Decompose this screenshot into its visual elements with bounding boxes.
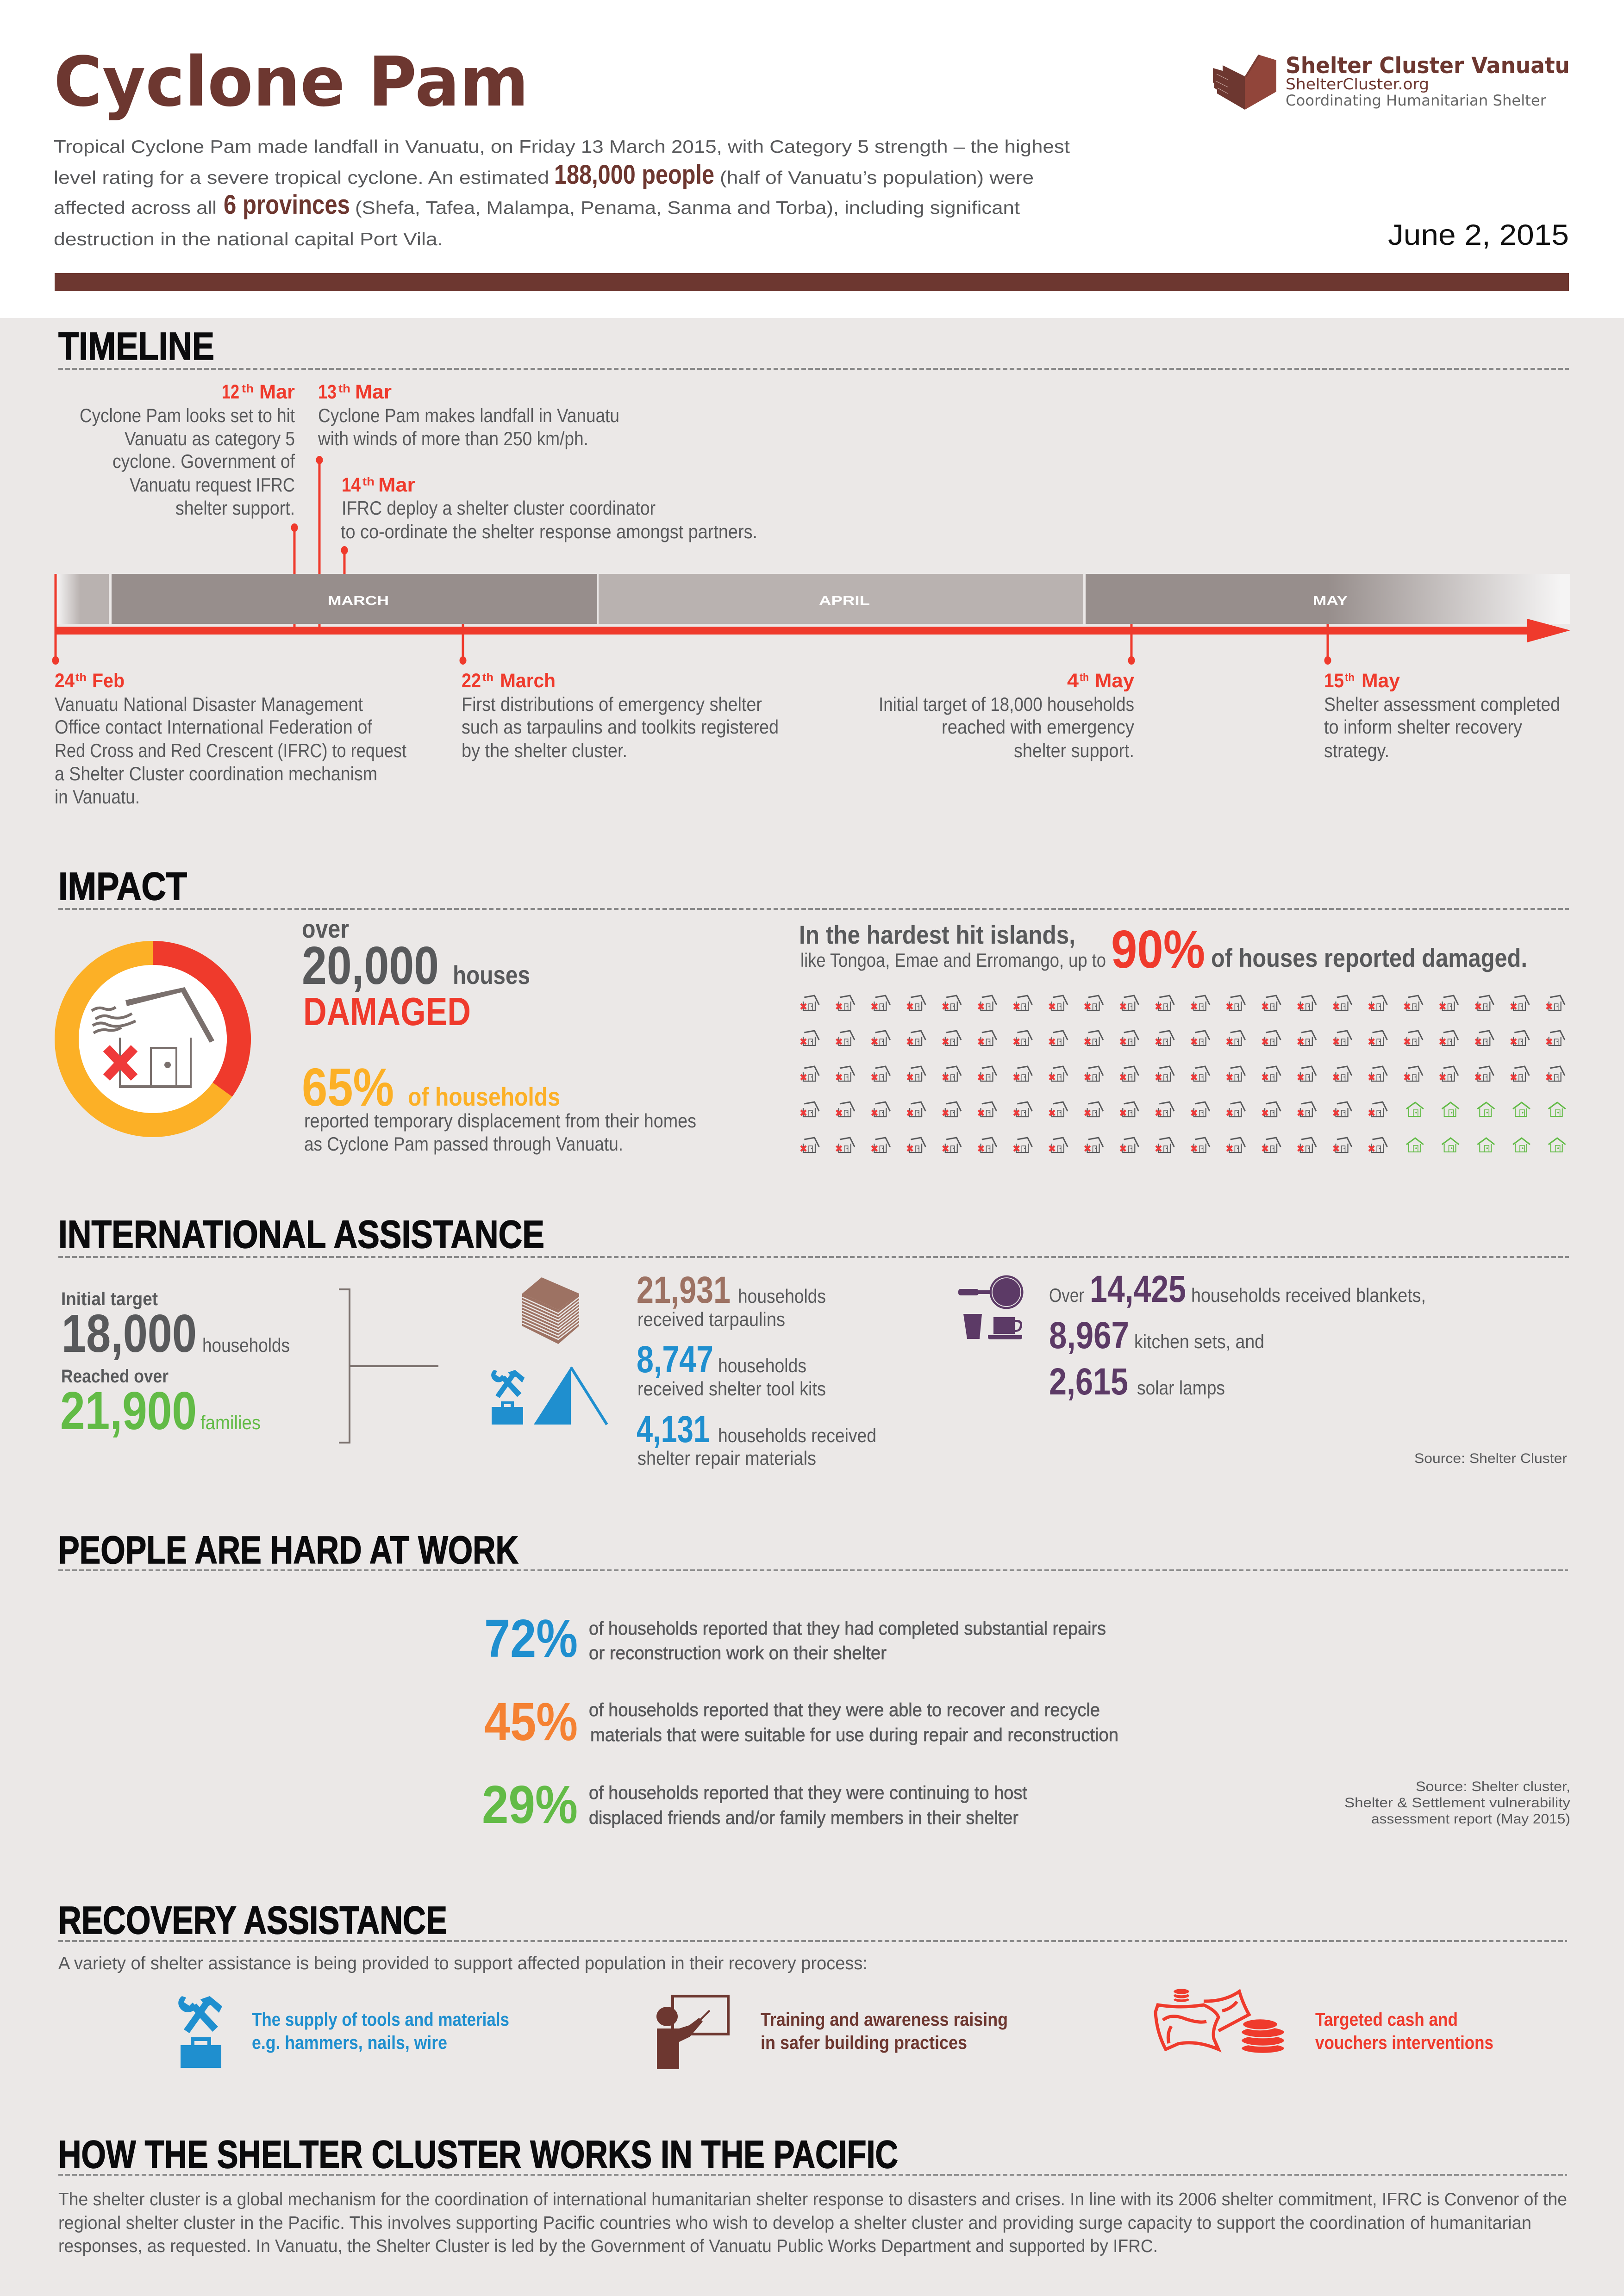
stat: blankets, kitchen sets, solar lamps: solar lamps <box>1137 1377 1225 1399</box>
month band: MARCH <box>328 593 389 608</box>
source note: Source: Shelter cluster, <box>1416 1779 1570 1794</box>
month band <box>57 574 1570 624</box>
stat: 72%: 72% <box>484 1608 578 1668</box>
event: 12th Mar: cyclone. Government of <box>112 450 295 472</box>
event: 24th Feb: 24 <box>55 670 75 692</box>
event: 12th Mar: Mar <box>259 381 295 403</box>
stat: blankets, kitchen sets, solar lamps: households received blankets, <box>1191 1284 1426 1306</box>
stat: blankets, kitchen sets, solar lamps: 8,967 <box>1049 1314 1129 1356</box>
event: 14th Mar: Mar <box>378 474 415 496</box>
title: Cyclone Pam <box>54 42 529 122</box>
stat: 20,000 houses damaged: 20,000 <box>302 935 439 996</box>
stat: blankets, kitchen sets, solar lamps: 2,615 <box>1049 1361 1128 1403</box>
event: 24th Feb: th <box>75 671 87 684</box>
stat: 45%: materials that were suitable for use during repair and reconstruction <box>590 1725 1118 1745</box>
stat: 65% of households: reported temporary displacement from their homes <box>304 1110 696 1132</box>
event: 22nd March: th <box>482 671 493 684</box>
intro paragraph: (half of Vanuatu’s population) were <box>720 168 1034 188</box>
intro paragraph <box>54 137 1070 249</box>
stat: blankets, kitchen sets, solar lamps <box>1049 1268 1426 1403</box>
event: 12th Mar: shelter support. <box>175 497 295 519</box>
stat: 45% <box>484 1692 1118 1752</box>
header <box>54 42 1570 291</box>
stat: 90% of houses: 90% <box>1111 919 1205 979</box>
stat: 72%: or reconstruction work on their shelter <box>589 1643 887 1663</box>
stat: 65% of households: of households <box>408 1082 560 1111</box>
stat: 90% of houses: In the hardest hit islands, <box>799 920 1075 949</box>
closing paragraph: responses, as requested. In Vanuatu, the Shelter Cluster is led by the Government of Vanuatu Public Works Department and supported by IFRC. <box>58 2236 1158 2256</box>
item: tools: e.g. hammers, nails, wire <box>252 2033 447 2053</box>
stat: blankets, kitchen sets, solar lamps: Over <box>1049 1284 1084 1306</box>
stat: tarpaulins <box>637 1269 826 1330</box>
intro paragraph: destruction in the national capital Port Vila. <box>54 230 443 249</box>
stat: 72%: of households reported that they had completed substantial repairs <box>589 1618 1106 1639</box>
event: 13th Mar <box>318 381 619 449</box>
month band: MAY <box>1313 593 1348 608</box>
stat: tarpaulins: 21,931 <box>637 1269 731 1311</box>
stat: 72% <box>484 1608 1106 1668</box>
event: 4th May: 4 <box>1067 670 1079 692</box>
icon: tools and tent <box>491 1367 607 1425</box>
event: 22nd March: 22 <box>462 670 481 692</box>
stat: target and reached: 18,000 <box>62 1303 197 1363</box>
event: 22nd March <box>462 670 779 761</box>
item: tools <box>178 1996 509 2068</box>
event: 12th Mar <box>80 381 295 519</box>
heading: international assistance: INTERNATIONAL ASSISTANCE <box>58 1213 544 1256</box>
stems <box>52 456 1331 665</box>
event: 22nd March: First distributions of emergency shelter <box>462 693 762 715</box>
stat: 29%: displaced friends and/or family members in their shelter <box>589 1808 1018 1828</box>
event: 14th Mar: 14 <box>342 474 361 496</box>
source note: Shelter & Settlement vulnerability <box>1344 1795 1570 1811</box>
stat: 90% of houses <box>799 919 1527 979</box>
event: 15th May: 15 <box>1324 670 1344 692</box>
event: 13th Mar: th <box>338 382 350 395</box>
stat: tool kits: households <box>718 1355 806 1376</box>
stat: tool kits: received shelter tool kits <box>637 1378 826 1400</box>
event: 24th Feb: Vanuatu National Disaster Management <box>55 693 363 715</box>
event: 24th Feb: Feb <box>92 670 125 692</box>
item: training <box>656 1996 1008 2069</box>
intro paragraph: (Shefa, Tafea, Malampa, Penama, Sanma and Torba), including significant <box>355 198 1020 218</box>
stat: 20,000 houses damaged: houses <box>453 960 530 989</box>
intro paragraph: level rating for a severe tropical cyclone. An estimated <box>54 168 549 188</box>
event: 4th May: shelter support. <box>1014 740 1134 761</box>
item: tools: The supply of tools and materials <box>252 2010 509 2030</box>
logo: Shelter Cluster Vanuatu: Shelter Cluster Vanuatu <box>1286 53 1570 79</box>
event: 12th Mar: Cyclone Pam looks set to hit <box>80 404 295 426</box>
bracket connector <box>339 1289 438 1443</box>
stat: repair materials <box>637 1408 876 1469</box>
heading: people are hard at work: PEOPLE ARE HARD AT WORK <box>58 1528 518 1572</box>
closing paragraph: regional shelter cluster in the Pacific. This involves supporting Pacific countries who wish to develop a shelter cluster and providing surge capacity to support the coordination of humanitarian <box>58 2213 1531 2233</box>
closing paragraph: The shelter cluster is a global mechanism for the coordination of international humanitarian shelter response to disasters and crises. In line with its 2006 shelter commitment, IFRC is Convenor of the <box>58 2190 1567 2209</box>
timeline graphic <box>52 456 1570 665</box>
event: 15th May <box>1324 670 1560 761</box>
stat: tarpaulins: households <box>738 1285 826 1307</box>
stat: tool kits: 8,747 <box>637 1338 713 1381</box>
event: 15th May: May <box>1362 670 1400 692</box>
stat: 20,000 houses damaged: DAMAGED <box>303 990 471 1034</box>
stat: repair materials: shelter repair materials <box>637 1447 816 1469</box>
event: 15th May: th <box>1345 671 1355 684</box>
event: 12th Mar: Vanuatu as category 5 <box>125 428 295 449</box>
event: 15th May: Shelter assessment completed <box>1324 693 1560 715</box>
event: 14th Mar: to co-ordinate the shelter response amongst partners. <box>341 521 757 542</box>
heading: how the shelter cluster works: HOW THE SHELTER CLUSTER WORKS IN THE PACIFIC <box>58 2133 898 2176</box>
stat: tarpaulins: received tarpaulins <box>637 1308 785 1330</box>
stat: 90% of houses: of houses reported damaged. <box>1211 943 1527 972</box>
stat: 65% of households: as Cyclone Pam passed through Vanuatu. <box>304 1133 623 1155</box>
stat: blankets, kitchen sets, solar lamps: 14,425 <box>1090 1268 1186 1310</box>
event: 13th Mar: Mar <box>355 381 392 403</box>
event: 24th Feb: a Shelter Cluster coordination mechanism <box>55 763 377 784</box>
event: 4th May <box>879 670 1134 761</box>
heading: impact: IMPACT <box>58 865 187 908</box>
stat: 65% of households: 65% <box>302 1057 394 1117</box>
heading: recovery assistance: RECOVERY ASSISTANCE <box>58 1898 447 1942</box>
event: 22nd March: such as tarpaulins and toolkits registered <box>462 716 779 738</box>
event: 22nd March: by the shelter cluster. <box>462 740 627 761</box>
date: June 2, 2015 <box>1388 219 1569 251</box>
stat: 90% of houses: like Tongoa, Emae and Erromango, up to <box>800 949 1106 971</box>
item: cash and vouchers <box>1156 1988 1493 2053</box>
logo: Shelter Cluster Vanuatu: ShelterCluster.org <box>1286 75 1429 93</box>
event: 24th Feb: Office contact International Federation of <box>55 716 372 738</box>
heading: timeline: TIMELINE <box>58 324 214 368</box>
icon: tarpaulin stack <box>522 1277 579 1344</box>
logo: Shelter Cluster Vanuatu: Coordinating Humanitarian Shelter <box>1286 92 1547 109</box>
header rule <box>55 273 1569 291</box>
stat: target and reached: Reached over <box>61 1366 169 1387</box>
event: 14th Mar: th <box>362 475 375 488</box>
stat: target and reached <box>60 1289 290 1441</box>
stat: tool kits <box>637 1338 826 1400</box>
intro paragraph: 6 provinces <box>224 190 350 220</box>
event: 24th Feb: Red Cross and Red Crescent (IFRC) to request <box>55 740 406 761</box>
event: 15th May: strategy. <box>1324 740 1389 761</box>
stat: 65% of households <box>302 1057 696 1155</box>
stat: repair materials: 4,131 <box>637 1408 710 1450</box>
icon: damaged house <box>92 987 214 1088</box>
closing paragraph <box>58 2190 1567 2256</box>
stat: 20,000 houses damaged <box>302 914 530 1034</box>
stat: target and reached: Initial target <box>61 1289 158 1309</box>
stat: blankets, kitchen sets, solar lamps: kitchen sets, and <box>1134 1331 1264 1352</box>
item: training: in safer building practices <box>761 2033 967 2053</box>
event: 14th Mar <box>341 474 757 542</box>
stat: target and reached: households <box>202 1334 290 1356</box>
stat: 29% <box>482 1774 1027 1835</box>
icon: kitchen set <box>958 1276 1023 1339</box>
stat: 29%: 29% <box>482 1774 578 1835</box>
stat: 45%: of households reported that they were able to recover and recycle <box>589 1700 1100 1720</box>
month band: APRIL <box>819 593 870 608</box>
event: 15th May: to inform shelter recovery <box>1324 716 1522 738</box>
event: 4th May: Initial target of 18,000 households <box>879 693 1134 715</box>
stat: 20,000 houses damaged: over <box>302 914 349 943</box>
event: 12th Mar: 12 <box>222 381 239 403</box>
intro paragraph: 188,000 people <box>554 160 714 190</box>
stat: repair materials: households received <box>718 1425 876 1446</box>
event: 13th Mar: with winds of more than 250 km/ph. <box>318 428 588 449</box>
intro paragraph: Tropical Cyclone Pam made landfall in Vanuatu, on Friday 13 March 2015, with Category 5 strength – the highest <box>54 137 1070 157</box>
event: 14th Mar: IFRC deploy a shelter cluster coordinator <box>342 497 656 519</box>
item: training: Training and awareness raising <box>761 2010 1008 2030</box>
arrow <box>55 619 1570 642</box>
event: 4th May: reached with emergency <box>942 716 1134 738</box>
source note <box>1344 1779 1570 1827</box>
event: 4th May: th <box>1080 671 1089 684</box>
donut chart: damaged houses <box>67 941 251 1125</box>
logo: Shelter Cluster Vanuatu <box>1213 53 1570 110</box>
stat: 29%: of households reported that they were continuing to host <box>589 1783 1027 1803</box>
stat: target and reached: 21,900 <box>60 1381 197 1441</box>
source note: Source: Shelter Cluster <box>1414 1451 1567 1466</box>
stat: 45%: 45% <box>484 1692 578 1752</box>
intro paragraph: affected across all <box>54 198 217 218</box>
event: 13th Mar: 13 <box>318 381 337 403</box>
item: cash and vouchers: vouchers interventions <box>1315 2033 1493 2053</box>
event: 13th Mar: Cyclone Pam makes landfall in Vanuatu <box>318 404 619 426</box>
event: 12th Mar: th <box>242 382 254 395</box>
recovery intro text: A variety of shelter assistance is being provided to support affected population in their recovery process: <box>58 1954 868 1973</box>
item: cash and vouchers: Targeted cash and <box>1315 2010 1458 2030</box>
event: 12th Mar: Vanuatu request IFRC <box>130 474 295 496</box>
source note: assessment report (May 2015) <box>1371 1811 1570 1827</box>
stat: target and reached: families <box>200 1412 261 1433</box>
event: 4th May: May <box>1095 670 1134 692</box>
event: 24th Feb <box>55 670 406 808</box>
event: 22nd March: March <box>500 670 556 692</box>
icon grid: 100 damaged and 10 intact houses <box>801 996 1566 1152</box>
event: 24th Feb: in Vanuatu. <box>55 786 140 808</box>
